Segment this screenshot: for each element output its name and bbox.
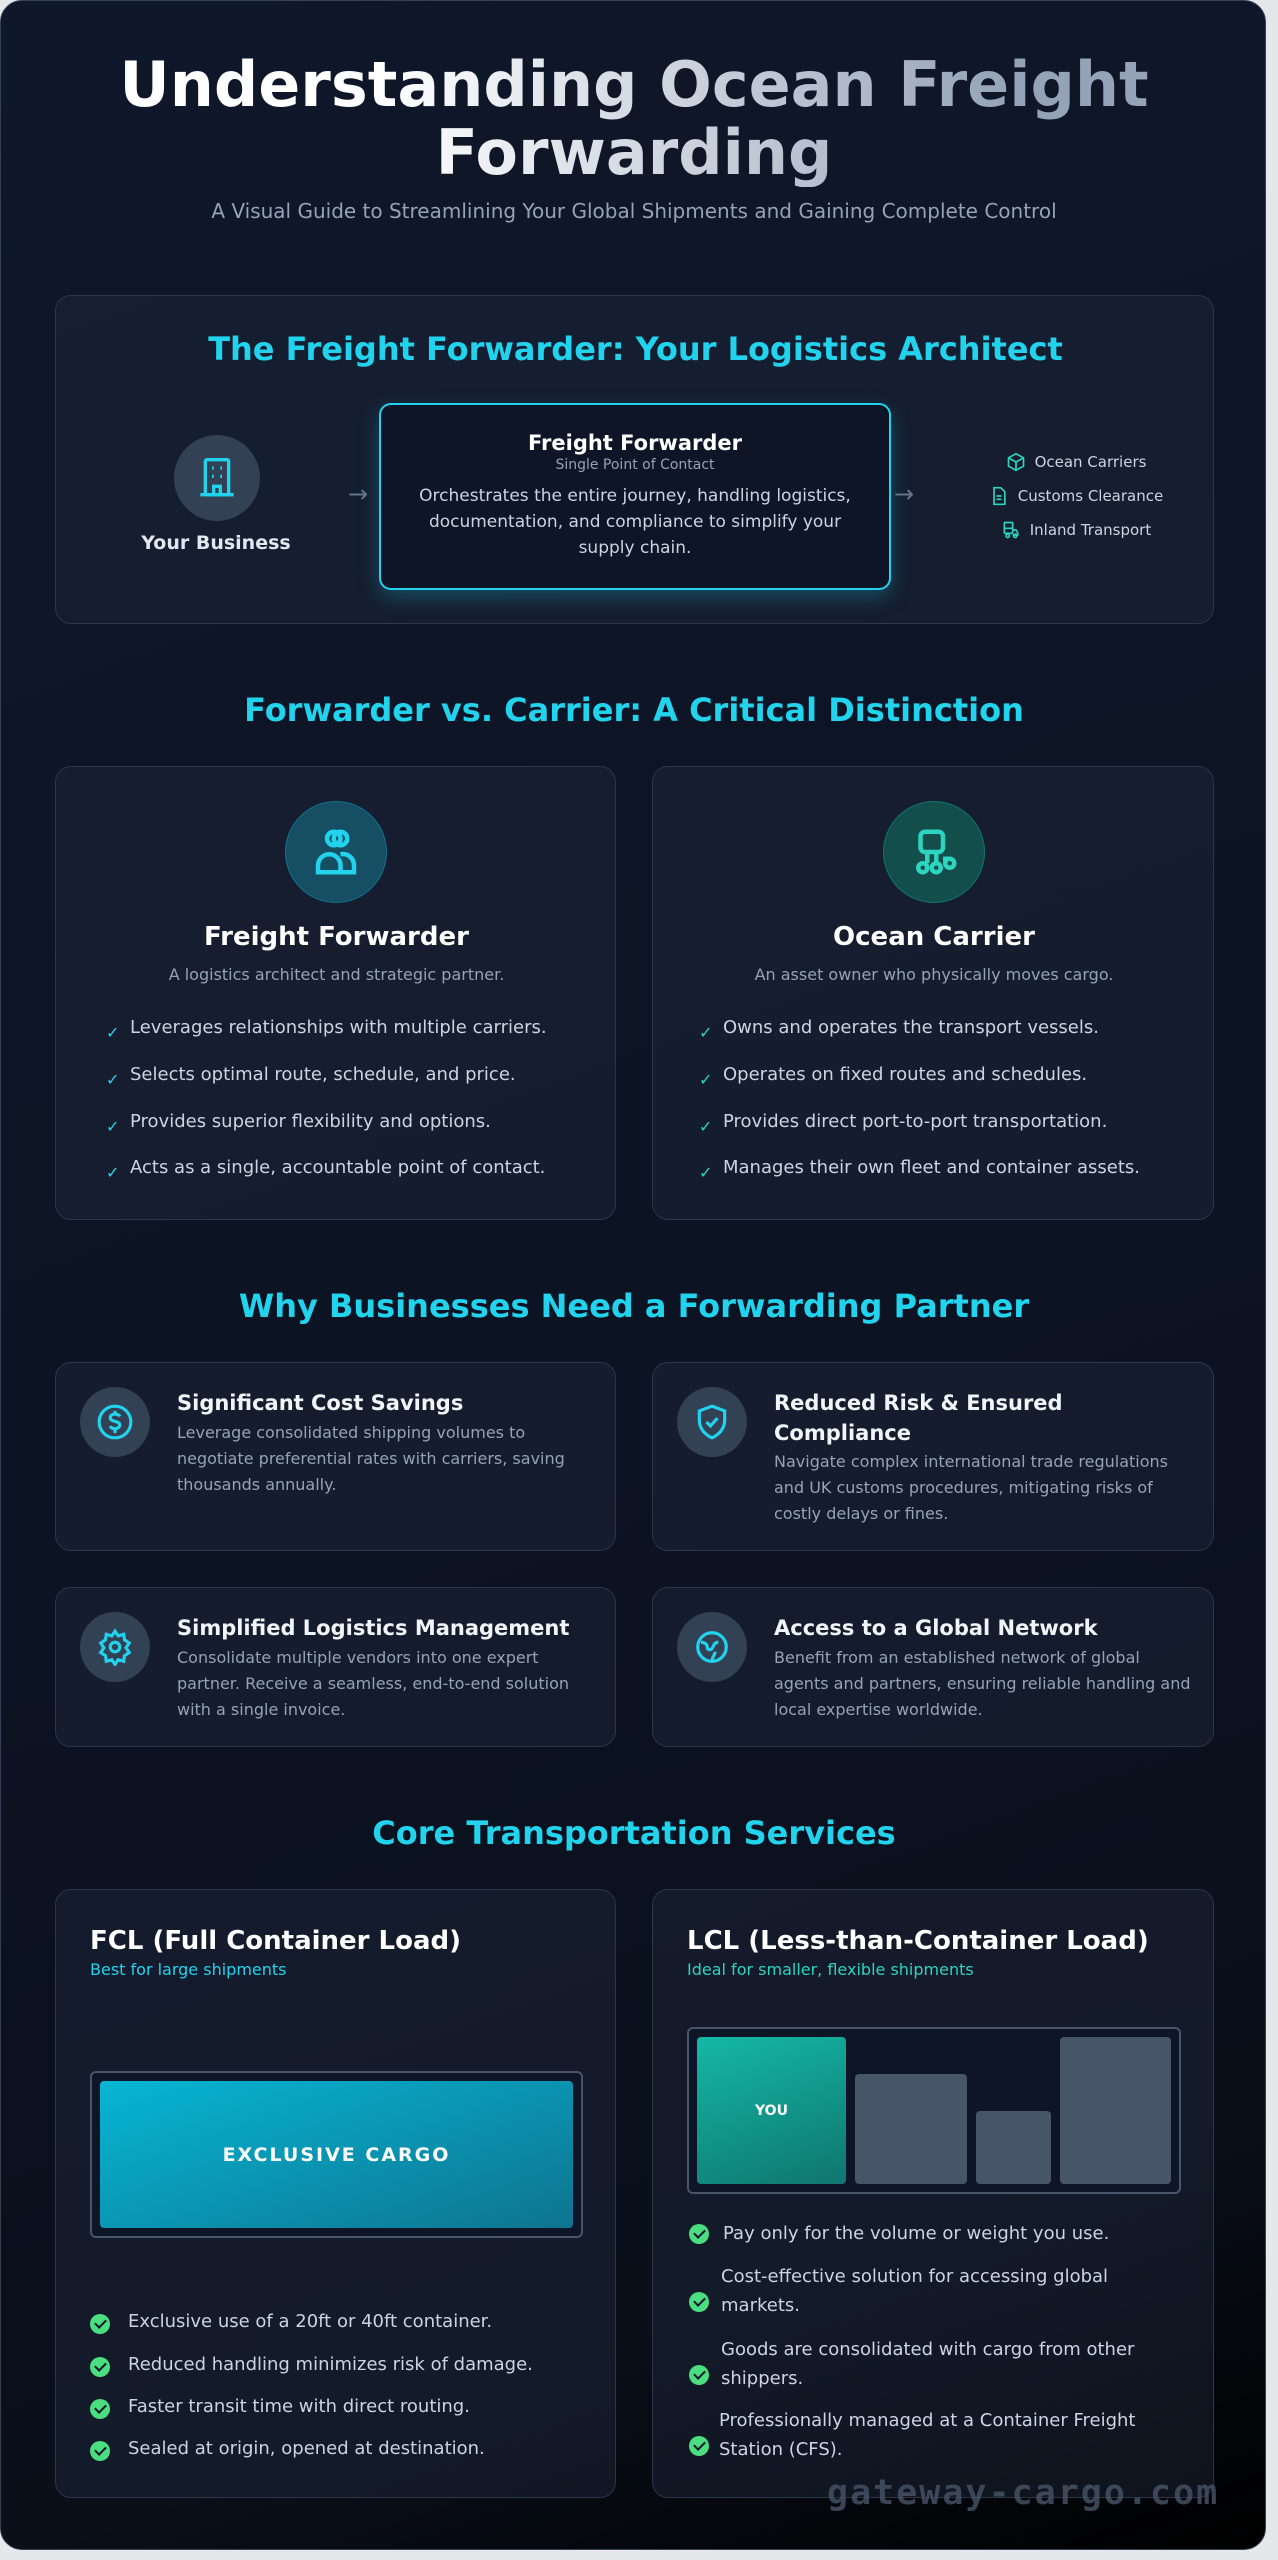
panel: global network [652, 1587, 1214, 1747]
panel: cost savings: Significant Cost Savings [177, 1391, 463, 1415]
list: forwarder points: ✓ [106, 1023, 119, 1042]
panel: freight forwarder card: Freight Forwarder [204, 922, 469, 952]
subtitle: A Visual Guide to Streamlining Your Global Shipments and Gaining Complete Control [211, 199, 1057, 223]
panel: simplified logistics: Simplified Logistics Management [177, 1616, 569, 1640]
list: services: Inland Transport [1030, 521, 1151, 539]
panel: FCL: Best for large shipments [90, 1960, 286, 1979]
list: forwarder points: Leverages relationships with multiple carriers. [130, 1017, 547, 1038]
heading: core transportation services: Core Transportation Services [372, 1814, 896, 1852]
list: carrier points: ✓ [699, 1023, 712, 1042]
list: LCL benefits: Pay only for the volume or weight you use. [723, 2223, 1109, 2244]
list: forwarder points: Selects optimal route, schedule, and price. [130, 1064, 516, 1085]
icon: carrier [883, 801, 985, 903]
list: carrier points: ✓ [699, 1117, 712, 1136]
panel: simplified logistics: Consolidate multiple vendors into one expert partner. Receive a seamless, end-to-end solution with a single invoice. [177, 1648, 569, 1719]
panel: ocean carrier card [652, 766, 1214, 1220]
list: services: Customs Clearance [1018, 487, 1163, 505]
arrow: → [894, 480, 914, 508]
list: forwarder points: ✓ [106, 1070, 119, 1089]
list: forwarder points [106, 1017, 547, 1182]
list: forwarder points: ✓ [106, 1163, 119, 1182]
list: carrier points: ✓ [699, 1070, 712, 1089]
panel: ocean carrier card: Ocean Carrier [833, 922, 1035, 952]
title: Forwarding [436, 116, 832, 189]
panel: FCL [55, 1889, 616, 2498]
arrow: → [348, 480, 368, 508]
title: Understanding Ocean Freight [119, 48, 1149, 121]
list: forwarder points: ✓ [106, 1117, 119, 1136]
panel: reduced risk [652, 1362, 1214, 1551]
box: freight forwarder: Orchestrates the entire journey, handling logistics, documentation, and compliance to simplify your supply chain. [419, 486, 851, 558]
heading: why businesses need partner: Why Businesses Need a Forwarding Partner [239, 1287, 1029, 1325]
panel: FCL: FCL (Full Container Load) [90, 1926, 461, 1956]
panel: global network: Access to a Global Network [774, 1616, 1098, 1640]
title [1, 51, 1267, 187]
icon: globe [677, 1612, 747, 1682]
panel: freight forwarder card [55, 766, 616, 1220]
panel: reduced risk: Reduced Risk & Ensured Compliance [774, 1391, 1063, 1445]
list: carrier points [699, 1017, 1140, 1182]
icon: gear [80, 1612, 150, 1682]
box: freight forwarder: Single Point of Contact [555, 457, 715, 473]
heading: logistics architect: The Freight Forwarder: Your Logistics Architect [208, 330, 1063, 368]
list: FCL benefits: Sealed at origin, opened at destination. [128, 2438, 485, 2459]
panel: freight forwarder card: A logistics architect and strategic partner. [169, 965, 504, 984]
diagram: shared container: YOU [755, 2102, 788, 2118]
list: carrier points: Manages their own fleet and container assets. [723, 1157, 1140, 1178]
panel: cost savings: Leverage consolidated shipping volumes to negotiate preferential rates with carriers, saving thousands annually. [177, 1423, 565, 1494]
list: services [993, 452, 1163, 539]
panel: LCL: LCL (Less-than-Container Load) [687, 1926, 1149, 1956]
list: LCL benefits: Goods are consolidated with cargo from other shippers. [721, 2339, 1134, 2389]
label: your business: Your Business [141, 532, 291, 554]
panel: LCL: Ideal for smaller, flexible shipments [687, 1960, 974, 1979]
box: freight forwarder: Freight Forwarder [528, 431, 742, 455]
panel: LCL [652, 1889, 1214, 2498]
list: FCL benefits: Reduced handling minimizes risk of damage. [128, 2354, 533, 2375]
panel: cost savings [55, 1362, 616, 1551]
list: forwarder points: Acts as a single, accountable point of contact. [130, 1157, 545, 1178]
list: carrier points: Owns and operates the transport vessels. [723, 1017, 1099, 1038]
list: FCL benefits: Faster transit time with direct routing. [128, 2396, 470, 2417]
icon: people [285, 801, 387, 903]
panel: simplified logistics [55, 1587, 616, 1747]
watermark: gateway-cargo.com [827, 2473, 1219, 2513]
list: services: Ocean Carriers [1035, 453, 1146, 471]
diagram: full container: EXCLUSIVE CARGO [223, 2144, 450, 2166]
diagram: full container [90, 2071, 583, 2238]
list: LCL benefits: Cost-effective solution for accessing global markets. [721, 2266, 1108, 2316]
icon: your business [174, 435, 260, 521]
panel: reduced risk: Navigate complex international trade regulations and UK customs procedures, mitigating risks of costly delays or fines. [774, 1452, 1168, 1523]
list: FCL benefits [90, 2311, 533, 2461]
list: forwarder points: Provides superior flexibility and options. [130, 1111, 491, 1132]
icon: shield [677, 1387, 747, 1457]
box: freight forwarder [379, 403, 891, 590]
list: carrier points: Operates on fixed routes and schedules. [723, 1064, 1087, 1085]
list: carrier points: Provides direct port-to-port transportation. [723, 1111, 1107, 1132]
panel: global network: Benefit from an established network of global agents and partners, ensuring reliable handling and local expertise worldwide. [774, 1648, 1190, 1719]
diagram: shared container [687, 2027, 1181, 2194]
list: LCL benefits: Professionally managed at a Container Freight Station (CFS). [719, 2410, 1135, 2460]
icon: dollar [80, 1387, 150, 1457]
list: carrier points: ✓ [699, 1163, 712, 1182]
heading: forwarder vs carrier: Forwarder vs. Carrier: A Critical Distinction [244, 691, 1024, 729]
panel: freight forwarder overview [55, 295, 1214, 624]
list: LCL benefits [689, 2223, 1135, 2460]
panel: ocean carrier card: An asset owner who physically moves cargo. [755, 965, 1113, 984]
list: FCL benefits: Exclusive use of a 20ft or 40ft container. [128, 2311, 492, 2332]
